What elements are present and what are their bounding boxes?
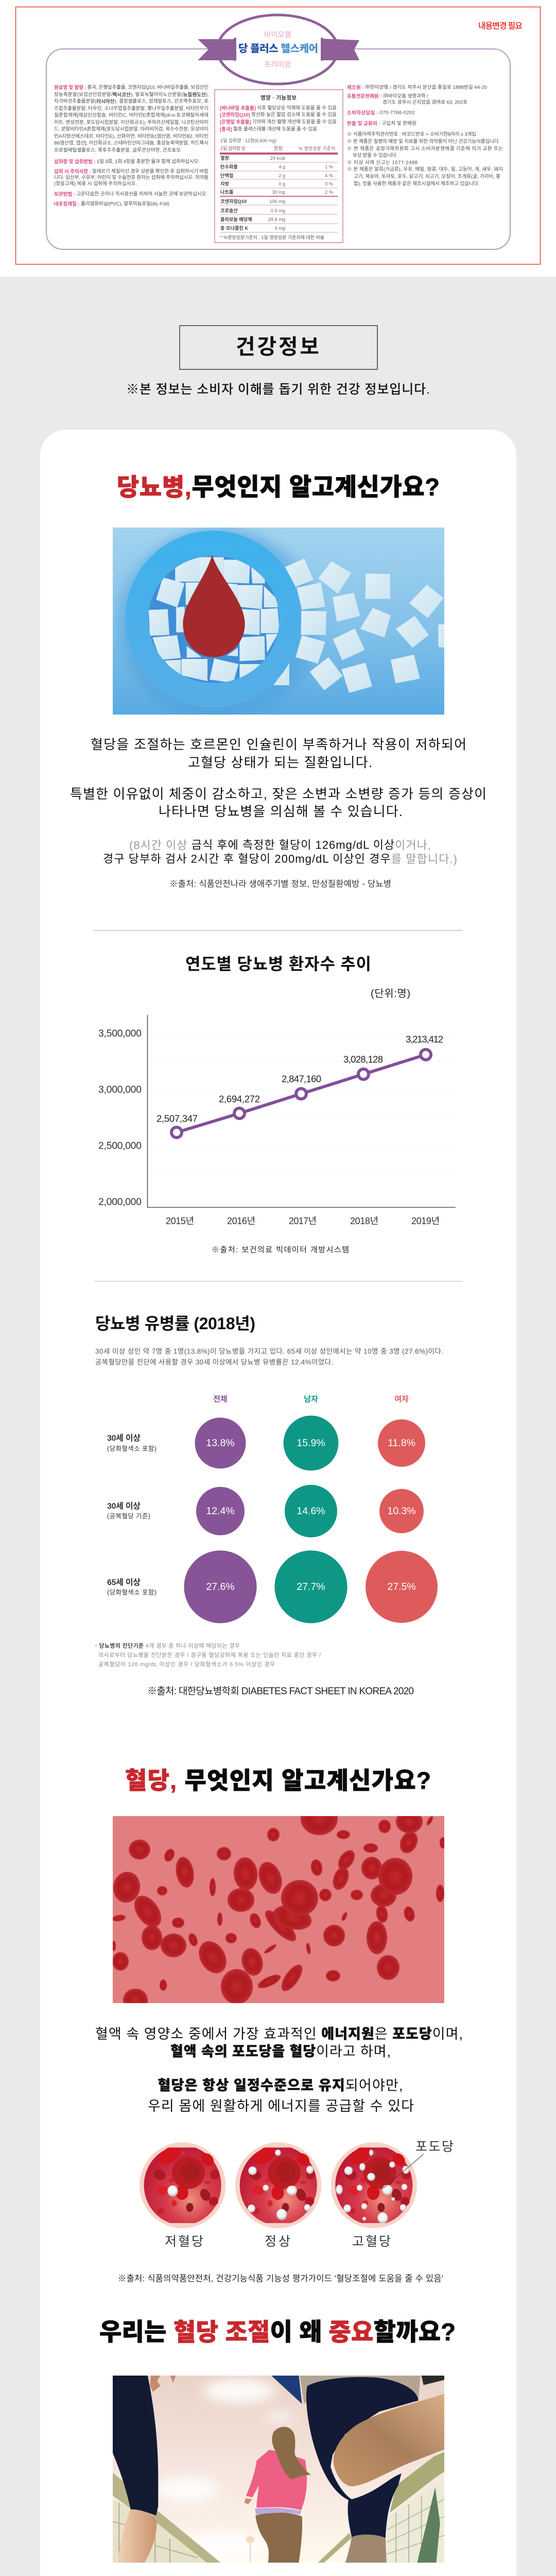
title: what is diabetes: 당뇨병,무엇인지 알고계신가요?	[117, 473, 440, 501]
text: diabetes description: 특별한 이유없이 체중이 감소하고, 잦은 소변과 소변량 증가 등의 증상이	[70, 786, 486, 802]
ingredients text: (항응고제) 복용 시 섭취에 주의하십시오.	[54, 180, 137, 187]
line chart: diabetes patients by year: 2015년	[166, 1216, 194, 1226]
left runner	[118, 2510, 157, 2563]
nutrition table: 총 모나콜린 K	[220, 225, 248, 231]
bubble chart: prevalence by age and sex: 27.5%	[387, 1581, 416, 1592]
diagram: glucose in blood by state: 포도당	[415, 2140, 454, 2154]
ingredients text: 차가버섯추출물분말(러시아산), 결정셀룰로스, 정제말토스, 건조맥주효모, 로	[54, 98, 208, 104]
nutrition table: 24 kcal	[270, 156, 285, 161]
diagnostic criteria note: 공복혈당이 126 mg/dL 이상인 경우 / 당화혈색소가 6.5% 이상인 경우	[98, 1660, 275, 1668]
line chart: diabetes patients by year: 3,000,000	[98, 1084, 142, 1095]
nutrition table: 단백질	[220, 173, 233, 178]
product badge: 프리미엄	[264, 60, 291, 69]
source note: ※출처: 식품의약품안전처, 건강기능식품 기능성 평가가이드 '혈당조절에 도움을 줄 수 있음'	[118, 2274, 443, 2283]
manufacturer text: 고기, 복숭아, 토마토, 호두, 닭고기, 쇠고기, 오징어, 조개류(굴, 가리비, 홍	[354, 173, 500, 179]
text: diagnostic criteria: 경구 당부하 검사 2시간 후 혈당이 200mg/dL 이상인 경우를 말합니다.)	[103, 852, 457, 866]
bubble chart: prevalence by age and sex: 여자	[394, 1395, 409, 1403]
ingredients text: 장농축분말(보검선인장분말/펙시코산), 발효녹혈아미노산분말(뉴질렌도산),	[54, 92, 209, 98]
label outline panel	[46, 49, 510, 249]
manufacturer text: 제조원 : ㈜한미양행 / 경기도 파주시 문산읍 통일로 1888번길 44-20	[347, 84, 487, 91]
text: blood sugar description: 혈액 속의 포도당을 혈당이라고 하며,	[170, 2044, 391, 2059]
text: diabetes description	[70, 737, 486, 819]
ingredients text: B6염산염, 엽산], 이산화규소, 스테아린산마그네슘, 홍삼농축액분말, 히드록시	[54, 140, 208, 146]
nutrition table: 4 g	[279, 164, 285, 170]
bubble chart: prevalence by age and sex: 27.7%	[297, 1581, 325, 1592]
bubble chart: prevalence by age and sex: 30세 이상	[107, 1433, 141, 1443]
nutrition table	[215, 90, 343, 243]
heading: health information box: 건강정보	[236, 335, 319, 359]
diagram: glucose in blood by state: 저혈당	[165, 2234, 203, 2249]
line chart: diabetes patients by year: 2,500,000	[98, 1140, 142, 1151]
product badge	[198, 15, 359, 84]
bubble chart: prevalence by age and sex: 남자	[304, 1395, 318, 1403]
ingredients text: 질혼합제제[제삼인산칼슘, 비타민C, 비타민E혼합제제(dl-α-토코페릴아세테	[54, 112, 208, 118]
manufacturer text	[347, 84, 503, 187]
ingredients text: 니다. 임산부, 수유부, 어린이 및 수술전후 환자는 섭취에 주의하십시오. 의약품	[54, 174, 208, 180]
manufacturer text: ※ 본 제품은 질병의 예방 및 치료를 위한 의약품이 아닌 건강기능식품입니다.	[347, 138, 500, 144]
bubble chart: prevalence by age and sex: (공복혈당 기준)	[107, 1513, 150, 1520]
diagram: glucose in blood by state	[140, 2140, 454, 2249]
ingredients text: 내포장재질 : 폴리염화비닐(PVC), 알루미늄호일(AL-Foil)	[54, 201, 169, 207]
right bridge	[387, 2477, 444, 2563]
nutrition table: 1일 섭취량 당	[220, 145, 246, 151]
heading: diabetes prevalence: 당뇨병 유병률 (2018년)	[95, 1314, 255, 1333]
left bridge	[113, 2499, 212, 2563]
diagnostic criteria note: · 당뇨병의 진단기준 4개 경우 중 하나 이상에 해당되는 경우	[95, 1642, 240, 1649]
ingredients text: 원료명 및 함량 : 홍국, 은행잎추출물, 코엔자임Q10, 바나바잎추출물, 보검선인	[54, 84, 208, 91]
diagram: glucose in blood by state: 고혈당	[352, 2234, 391, 2249]
circle illustrations	[140, 2142, 417, 2228]
bubble chart: prevalence by age and sex: (당화혈색소 포함)	[107, 1589, 157, 1596]
text: blood sugar description	[95, 2026, 463, 2114]
diagram: glucose in blood by state: 정상	[265, 2234, 290, 2249]
line chart: diabetes patients by year: 3,213,412	[406, 1033, 443, 1045]
nutrition table: % 영양성분 기준치	[299, 146, 335, 151]
bubble chart: prevalence by age and sex: 전체	[213, 1395, 228, 1403]
manufacturer text: 반품 및 교환처 : 구입처 및 판매원	[347, 121, 416, 127]
right runner	[271, 2376, 302, 2404]
line chart: diabetes patients by year: (단위:명)	[371, 988, 410, 999]
ingredients text: 민A지방산에스테르, 비타민E), 산화아연, 비타민B1염산염, 비타민B2, 비타민	[54, 134, 208, 139]
nutrition table: [홍국] 혈중 콜레스테롤 개선에 도움을 줄 수 있음	[220, 126, 317, 132]
manufacturer text: ※ 본 제품은 공정거래위원회 고시 소비자분쟁해결 기준에 의거 교환 또는	[347, 145, 503, 151]
bubble chart: prevalence by age and sex: 14.6%	[297, 1505, 325, 1517]
heading: yearly patients: 연도별 당뇨병 환자수 추이	[185, 955, 371, 973]
line chart: diabetes patients by year: 2016년	[227, 1216, 255, 1226]
line chart: diabetes patients by year: 2,847,160	[282, 1074, 321, 1084]
text: diagnostic criteria: (8시간 이상 금식 후에 측정한 혈당이 126mg/dL 이상이거나,	[129, 839, 431, 851]
center runner	[255, 2513, 302, 2563]
nutrition table: [은행잎 추출물] 기억력 개선·혈행 개선에 도움을 줄 수 있음	[220, 118, 337, 125]
text: diagnostic criteria	[103, 839, 457, 866]
nutrition table: 0 g	[279, 181, 285, 187]
line chart: diabetes patients by year: 3,500,000	[98, 1028, 142, 1039]
manufacturer text: ※ 이상 사례 신고는 1577-2488	[347, 160, 418, 166]
manufacturer text: ※ 본 제품은 알류(가금류), 우유, 메밀, 땅콩, 대두, 밀, 고등어, 게, 새우, 돼지	[347, 166, 503, 172]
nutrition table: 30 mg	[272, 190, 285, 195]
source note: ※출처: 식품안전나라 생애주기별 정보, 만성질환예방 - 당뇨병	[169, 879, 391, 889]
nutrition table: 나트륨	[220, 189, 234, 195]
bubble chart: prevalence by age and sex: 27.6%	[206, 1581, 235, 1592]
manufacturer text: 보상 받을 수 있습니다.	[353, 152, 397, 159]
bubble chart: prevalence by age and sex: (당화혈색소 포함)	[107, 1445, 157, 1452]
source note: ※출처: 대한당뇨병학회 DIABETES FACT SHEET IN KOREA 2020	[147, 1686, 414, 1697]
bubble chart: prevalence by age and sex	[107, 1395, 438, 1623]
ingredients text: 이트, 변성전분, 포도당시럽분말, 이산화규소), 푸마르산제일철, 니코틴산아미	[54, 120, 208, 126]
product badge: 바이오봄	[264, 30, 291, 39]
ingredients text	[54, 84, 209, 207]
bubble chart: prevalence by age and sex: 11.8%	[388, 1437, 415, 1449]
bubble chart: prevalence by age and sex: 13.8%	[206, 1437, 235, 1449]
prevalence description: 공복혈당만을 진단에 사용할 경우 30세 이상에서 당뇨병 유병률은 12.4%이었다.	[95, 1358, 333, 1366]
nutrition table: * %영양성분기준치 : 1일 영양성분 기준치에 대한 비율	[220, 234, 324, 240]
line chart: diabetes patients by year: 2,694,272	[219, 1093, 260, 1105]
white content card	[40, 430, 516, 2576]
line chart: diabetes patients by year: 2,507,347	[157, 1113, 198, 1124]
bubble chart: prevalence by age and sex: 15.9%	[297, 1437, 325, 1449]
nutrition table: 지방	[220, 181, 229, 187]
title: why blood sugar control matters: 우리는 혈당 조절이 왜 중요할까요?	[99, 2318, 456, 2345]
line chart: diabetes patients by year: 2,000,000	[98, 1196, 142, 1208]
photo: red blood cells	[113, 1816, 444, 2003]
manufacturer text: 경기도 광주시 곤지암읍 광여로 63, 202호	[383, 99, 467, 105]
photo: blood drop and sugar cubes	[113, 528, 444, 720]
bubble chart: prevalence by age and sex: 30세 이상	[107, 1501, 141, 1511]
ingredients text: 즈힙추출물분말, 타우린, 소나무껍질추출분말, 뽕나무잎추출분말, 비타민무기	[54, 105, 208, 111]
nutrition table: 2 g	[279, 173, 285, 178]
text: blood sugar description: 혈액 속 영양소 중에서 가장 효과적인 에너지원은 포도당이며,	[95, 2026, 463, 2042]
prevalence description	[95, 1348, 443, 1366]
product label frame	[15, 7, 541, 264]
nutrition table: 1일 섭취량 : 12정(6,600 mg)	[220, 138, 276, 143]
diagnostic criteria note: 의사로부터 당뇨병을 진단받은 경우 / 경구용 혈당강하제 복용 또는 인슐린 치료 중인 경우 /	[98, 1651, 321, 1658]
nutrition table: 4 %	[325, 173, 333, 178]
disclaimer text: ※본 정보는 소비자 이해를 돕기 위한 건강 정보입니다.	[126, 382, 430, 397]
line chart: diabetes patients by year: 3,028,128	[343, 1054, 383, 1064]
nutrition table: 탄수화물	[220, 164, 238, 170]
nutrition table: 열량	[220, 155, 229, 161]
line chart: diabetes patients by year: 2019년	[411, 1216, 440, 1226]
outside cubes	[273, 558, 444, 693]
nutrition table: 코로솔산	[220, 208, 238, 213]
nutrition table: 0.5 mg	[271, 208, 285, 213]
revision note: 내용변경 필요	[478, 22, 523, 31]
nutrition table: 0 %	[325, 181, 333, 187]
nutrition table: 함량	[274, 145, 283, 151]
manufacturer text: 소비자상담실 : 070-7766-0202	[347, 109, 415, 115]
line chart: diabetes patients by year	[98, 988, 456, 1226]
manufacturer text: ※ 식품이력추적관리번호 : 바코드번호 + 소비기한8자리 x 3개입	[347, 131, 476, 137]
nutrition table: 100 mg	[269, 199, 285, 204]
nutrition table: 4 mg	[275, 226, 285, 231]
line chart: diabetes patients by year: 2018년	[350, 1216, 378, 1226]
diagnostic criteria note	[95, 1642, 321, 1668]
nutrition table: [바나바잎 추출물] 식후 혈당상승 억제에 도움을 줄 수 있음	[220, 105, 337, 111]
ingredients text: 섭취 시 주의사항 : 알레르기 체질이신 경우 성분을 확인한 후 섭취하시기 바랍	[54, 168, 208, 174]
text: diabetes description: 혈당을 조절하는 호르몬인 인슐린이 부족하거나 작용이 저하되어	[91, 737, 466, 752]
text: blood sugar description: 혈당은 항상 일정수준으로 유지되어야만,	[158, 2078, 403, 2093]
heading: health information box	[180, 326, 377, 369]
nutrition table: 1 %	[325, 164, 333, 170]
bubble chart: prevalence by age and sex: 10.3%	[387, 1505, 416, 1517]
nutrition table: [코엔자임Q10] 항산화·높은 혈압 감소에 도움을 줄 수 있음	[220, 111, 337, 117]
prevalence description: 30세 이상 성인 약 7명 중 1명(13.8%)이 당뇨병을 가지고 있다. 65세 이상 성인에서는 약 10명 중 3명 (27.6%)이다.	[95, 1348, 443, 1355]
text: diabetes description: 나타나면 당뇨병을 의심해 볼 수 있습니다.	[159, 804, 403, 819]
nutrition table: 플라보놀 배당체	[220, 216, 252, 222]
ingredients text: 드, 분말비타민A혼합제제(포도당시럽분말, 아라비아검, 옥수수전분, 유성비타	[54, 126, 208, 132]
text: blood sugar description: 우리 몸에 원활하게 에너지를 공급할 수 있다	[148, 2098, 414, 2114]
manufacturer text: 합), 잣을 사용한 제품과 같은 제조시설에서 제조하고 있습니다.	[354, 180, 479, 187]
source note: ※출처: 보건의료 빅데이터 개방시스템	[212, 1246, 349, 1254]
ingredients text: 보관방법 : 고온다습한 곳이나 직사광선을 피하여 서늘한 곳에 보관하십시오.	[54, 191, 207, 197]
ingredients text: 섭취량 및 섭취방법 : 1일 3회, 1회 4정을 충분한 물과 함께 섭취하십시오.	[54, 159, 200, 165]
nutrition table: 코엔자임Q10	[220, 198, 247, 204]
nutrition table: 2 %	[325, 190, 333, 195]
nutrition table: 영양 · 기능정보	[260, 94, 297, 101]
product badge: 당 플러스 헬스케어	[238, 43, 318, 55]
bubble chart: prevalence by age and sex: 65세 이상	[107, 1578, 141, 1587]
text: diabetes description: 고혈당 상태가 되는 질환입니다.	[188, 755, 372, 770]
bubble chart: prevalence by age and sex: 12.4%	[206, 1505, 235, 1517]
nutrition table: 28.8 mg	[268, 217, 285, 222]
line chart: diabetes patients by year: 2017년	[289, 1216, 317, 1226]
manufacturer text: 유통전문판매원 : ㈜바이오봄 생명과학 /	[347, 93, 428, 99]
title: what is blood sugar: 혈당, 무엇인지 알고계신가요?	[125, 1767, 431, 1794]
photo: runners	[113, 2376, 444, 2563]
ingredients text: 프로필메틸셀룰로스, 흑후추추출분말, 글루콘산아연, 건조효모	[54, 147, 181, 154]
